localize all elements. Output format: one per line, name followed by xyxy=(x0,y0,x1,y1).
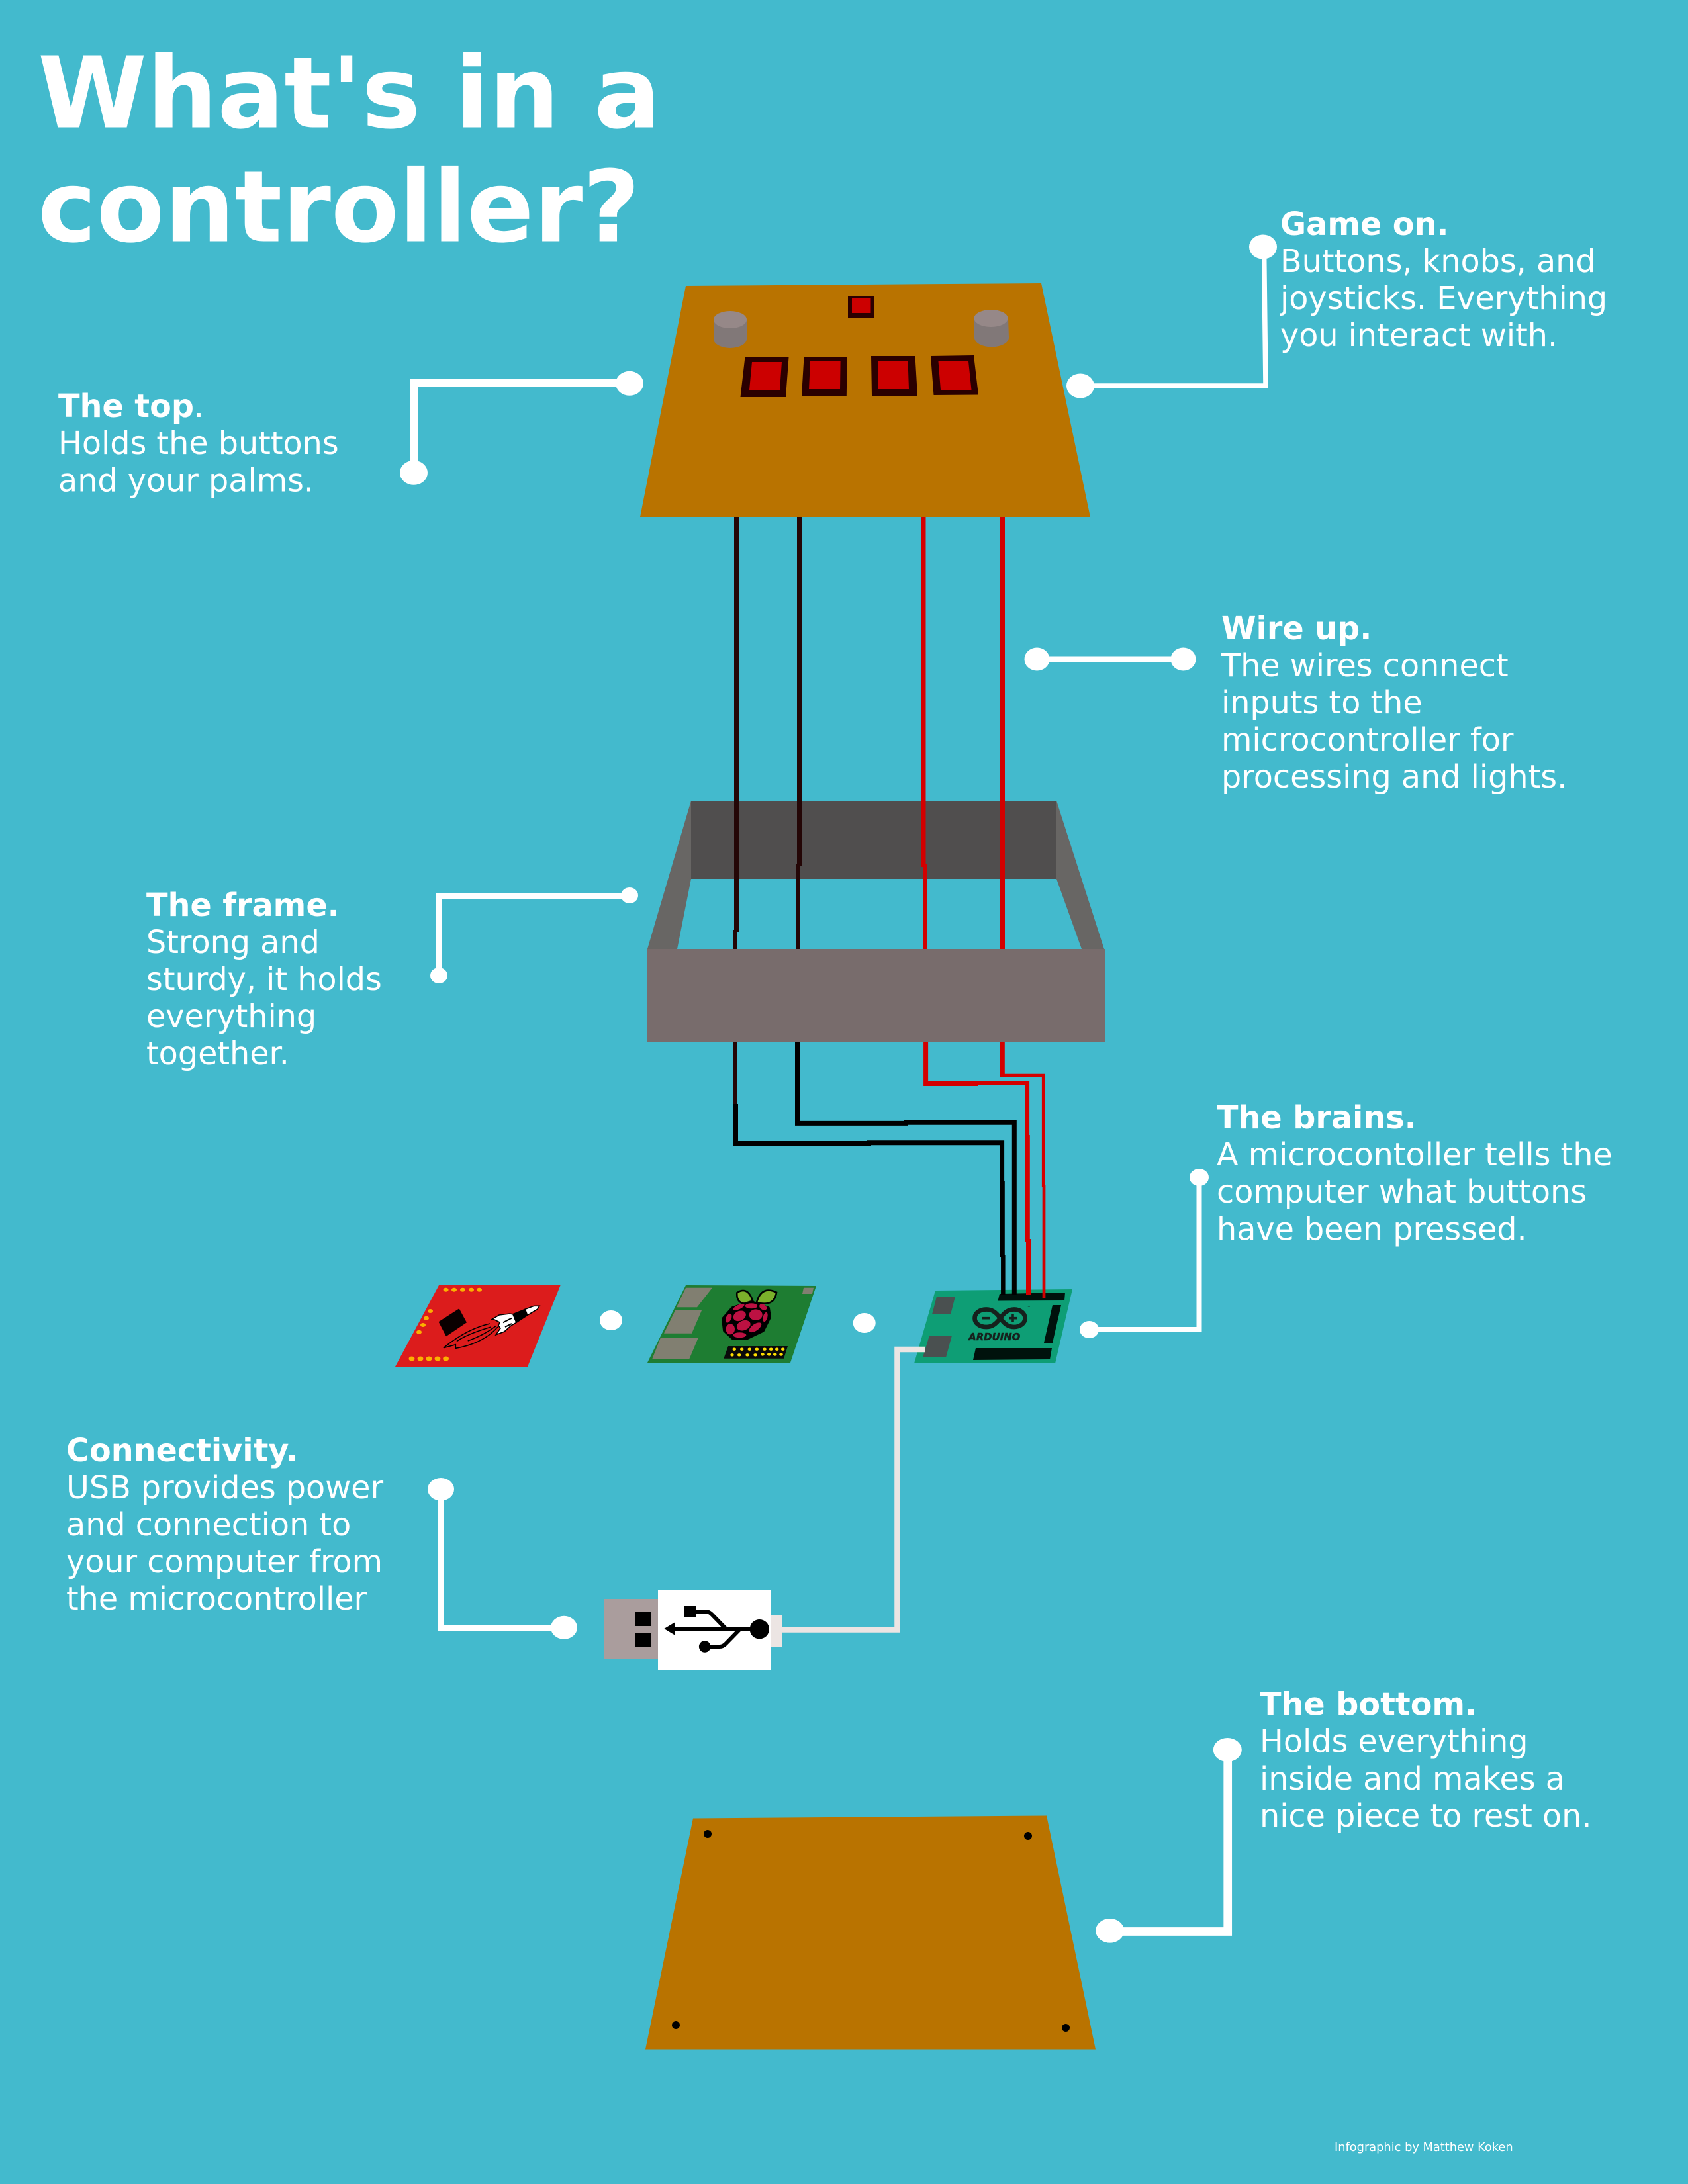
text: the top: and your palms. xyxy=(58,463,314,499)
arduino logo: ™ xyxy=(1026,1305,1031,1310)
text: the top xyxy=(58,388,339,499)
gpio header xyxy=(724,1346,788,1359)
board: arduino xyxy=(914,1289,1072,1363)
connector: wire up xyxy=(1025,647,1196,671)
title: What's in a xyxy=(38,36,661,151)
text: game on: joysticks. Everything xyxy=(1280,281,1607,317)
knob right xyxy=(974,310,1009,347)
text: the frame: everything xyxy=(146,999,316,1035)
connector: game on xyxy=(1066,234,1277,398)
wires: top panel to frame xyxy=(735,515,1002,953)
text: game on: Buttons, knobs, and xyxy=(1280,244,1596,280)
text: the frame xyxy=(146,887,382,1072)
connector: the brains xyxy=(1080,1169,1209,1338)
text: connectivity: USB provides power xyxy=(66,1470,383,1506)
text: game on: you interact with. xyxy=(1280,318,1558,354)
text: the brains xyxy=(1217,1100,1613,1248)
text: the bottom: The bottom. xyxy=(1260,1686,1477,1723)
raspberry logo xyxy=(724,1291,776,1338)
title: controller? xyxy=(38,150,640,265)
text: the bottom xyxy=(1260,1686,1591,1835)
bottom panel xyxy=(645,1816,1096,2049)
knob left xyxy=(714,311,747,348)
frame back wall and sides xyxy=(647,801,1104,949)
text: the top: Holds the buttons xyxy=(58,426,339,462)
text: connectivity: the microcontroller xyxy=(66,1581,367,1617)
text: the bottom: nice piece to rest on. xyxy=(1260,1798,1591,1835)
connector: connectivity xyxy=(428,1478,577,1639)
text: the brains: computer what buttons xyxy=(1217,1174,1587,1210)
separator dot 2 xyxy=(853,1313,876,1333)
text: connectivity: your computer from xyxy=(66,1544,383,1580)
text: the frame: Strong and xyxy=(146,925,320,961)
text: the frame: sturdy, it holds xyxy=(146,962,382,998)
board: raspberry pi xyxy=(647,1285,816,1363)
text: wire up: inputs to the xyxy=(1221,685,1423,721)
text: the bottom: Holds everything xyxy=(1260,1723,1528,1760)
wires: frame to arduino xyxy=(735,1039,1044,1298)
text: game on: Game on. xyxy=(1280,206,1449,243)
usb plug xyxy=(604,1590,782,1670)
board: red rocket xyxy=(395,1285,561,1367)
text: the frame: The frame. xyxy=(146,887,340,924)
frame front xyxy=(647,949,1105,1042)
separator dot 1 xyxy=(600,1310,622,1330)
connector: the frame xyxy=(430,887,638,983)
text: wire up xyxy=(1221,611,1567,796)
top panel xyxy=(640,283,1090,517)
text: the top: The top. xyxy=(58,388,204,425)
text: the frame: together. xyxy=(146,1036,289,1072)
text: the brains: have been pressed. xyxy=(1217,1211,1527,1248)
text: game on xyxy=(1280,206,1607,354)
text: wire up: processing and lights. xyxy=(1221,759,1567,796)
text: the brains: The brains. xyxy=(1217,1100,1417,1136)
small red button xyxy=(848,296,874,318)
text: connectivity: Connectivity. xyxy=(66,1433,298,1469)
title xyxy=(38,36,661,265)
connector: the top xyxy=(400,371,643,485)
arduino logo xyxy=(968,1305,1031,1343)
text: wire up: Wire up. xyxy=(1221,611,1372,647)
usb cable xyxy=(782,1349,925,1629)
usb symbol xyxy=(664,1606,769,1653)
text: connectivity: and connection to xyxy=(66,1507,351,1543)
text: the brains: A microcontoller tells the xyxy=(1217,1137,1613,1173)
arcade buttons xyxy=(740,355,978,397)
rocket icon xyxy=(444,1306,539,1348)
arduino logo: ARDUINO xyxy=(968,1332,1020,1343)
text: wire up: The wires connect xyxy=(1221,648,1509,684)
text: wire up: microcontroller for xyxy=(1221,722,1514,758)
credit: Infographic by Matthew Koken xyxy=(1335,2140,1513,2154)
connector: the bottom xyxy=(1096,1738,1242,1943)
text: connectivity xyxy=(66,1433,383,1617)
text: the bottom: inside and makes a xyxy=(1260,1761,1565,1797)
